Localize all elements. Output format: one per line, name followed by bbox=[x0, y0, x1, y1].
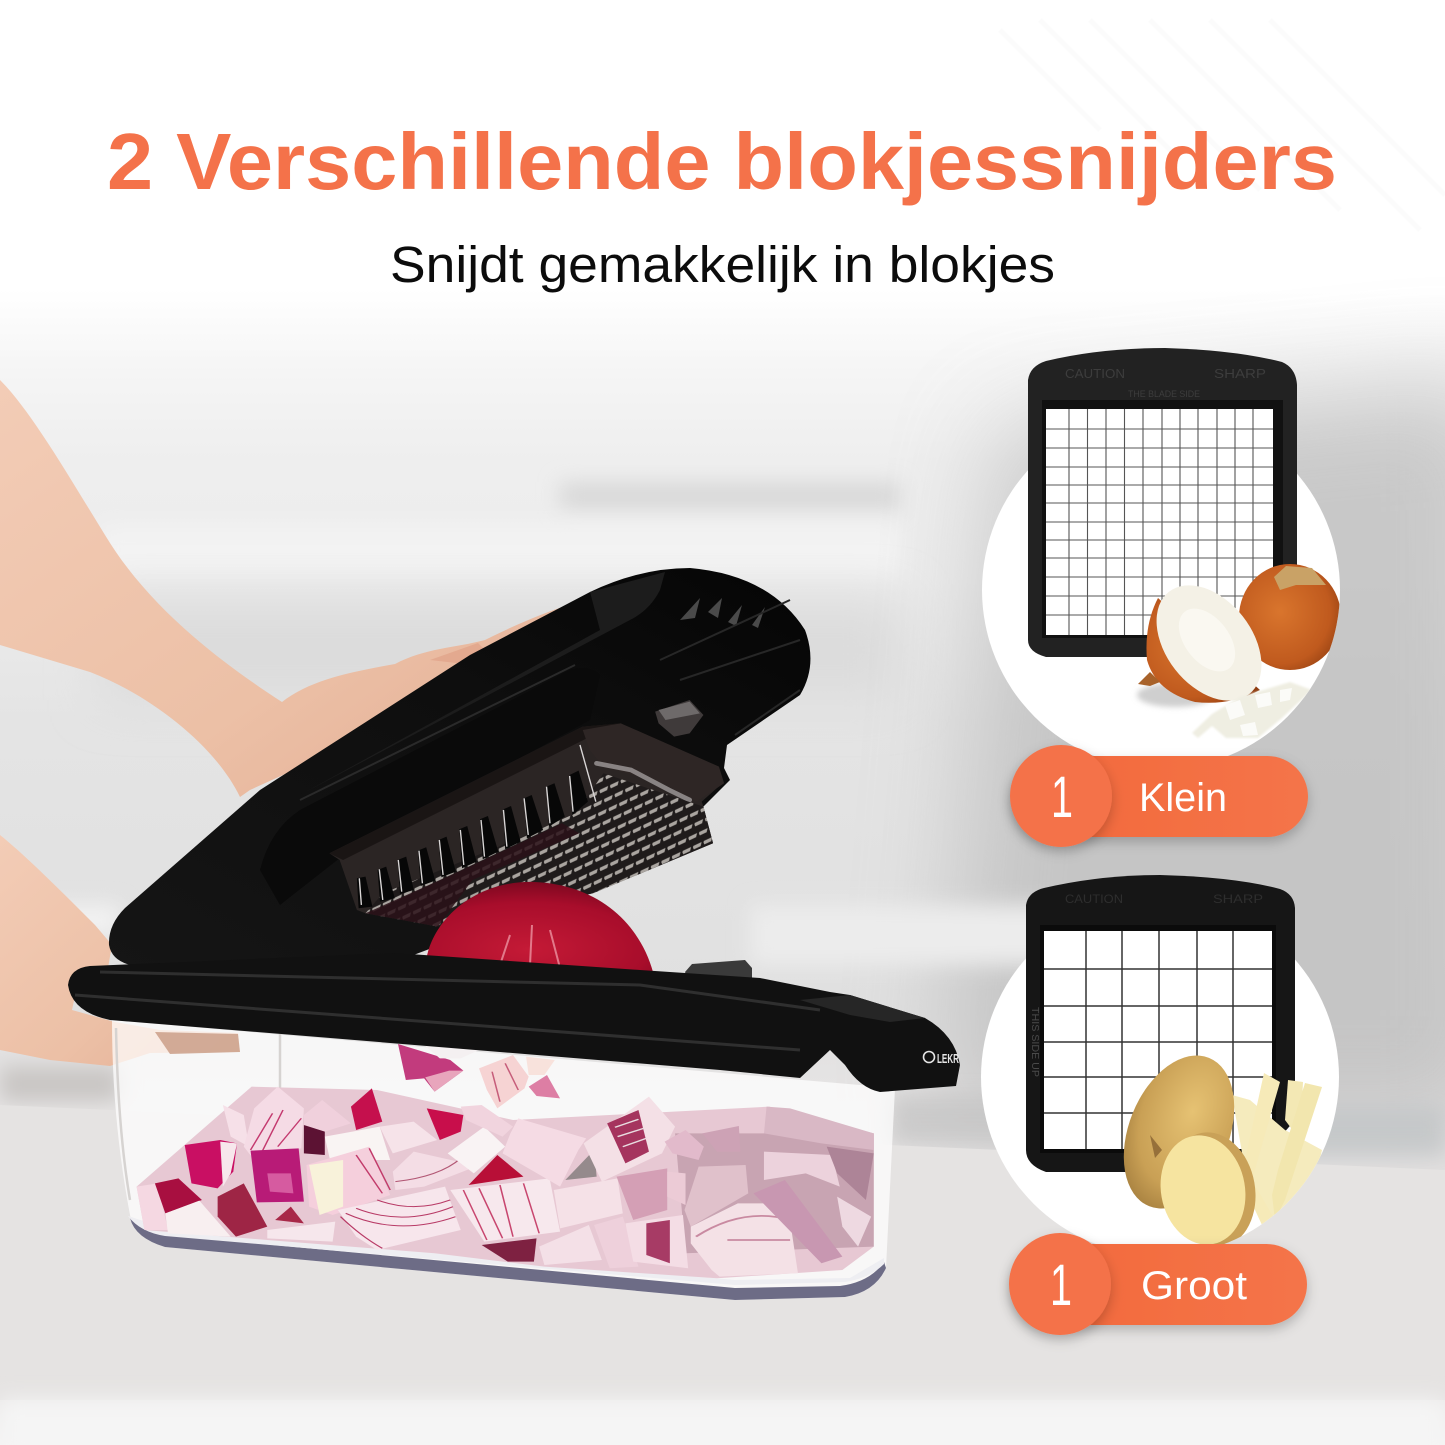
blade grid underside bbox=[366, 773, 713, 927]
logo on handle: LEKR bbox=[937, 1051, 959, 1066]
small dice blade frame: CAUTION bbox=[1065, 366, 1125, 381]
left group bbox=[137, 1183, 168, 1230]
base rim and handle bbox=[68, 953, 960, 1092]
label pill: Klein: 1 bbox=[1051, 765, 1073, 830]
red onion bbox=[426, 882, 653, 972]
container bbox=[112, 1020, 895, 1300]
number badge bbox=[1010, 745, 1112, 847]
panel: small cutter "Klein" bbox=[982, 348, 1341, 847]
white circle bbox=[981, 898, 1339, 1256]
small dice blade frame: SHARP bbox=[1214, 366, 1266, 381]
white circle bbox=[982, 411, 1340, 769]
big ringed piece bbox=[338, 1187, 461, 1250]
large dice blade frame: CAUTION bbox=[1065, 892, 1123, 906]
hand: lower hand gripping the base bbox=[0, 835, 240, 1066]
label pill: Groot: Groot bbox=[1141, 1264, 1247, 1308]
small latch on base bbox=[685, 960, 752, 985]
falling pieces bbox=[398, 1044, 463, 1092]
label pill: Klein bbox=[1010, 745, 1308, 847]
hand: upper arm holding the lid bbox=[0, 380, 575, 797]
large dice blade frame: SHARP bbox=[1213, 892, 1263, 906]
lid details bbox=[260, 572, 800, 905]
label pill: Klein: Klein bbox=[1139, 776, 1227, 820]
lid: black upper arm bbox=[109, 568, 810, 966]
logo on handle bbox=[924, 1051, 959, 1066]
ringed block bbox=[450, 1178, 560, 1242]
label pill: Groot bbox=[1009, 1233, 1307, 1335]
title: 2 Verschillende blokjessnijders bbox=[107, 117, 1337, 206]
number badge bbox=[1009, 1233, 1111, 1335]
chopped red onion bbox=[137, 1044, 874, 1278]
right group bbox=[617, 1168, 667, 1220]
blade block bbox=[329, 700, 724, 927]
small dice blade frame bbox=[1028, 348, 1297, 657]
large dice blade frame bbox=[1026, 875, 1295, 1172]
subtitle: Snijdt gemakkelijk in blokjes bbox=[390, 236, 1055, 293]
food chopper bbox=[68, 568, 960, 1300]
small dice blade frame: THE BLADE SIDE bbox=[1128, 389, 1200, 399]
panel: large cutter "Groot" bbox=[981, 875, 1339, 1335]
large dice blade frame: THIS SIDE UP bbox=[1029, 1007, 1040, 1077]
potatoes and fries bbox=[1124, 1056, 1322, 1244]
onions and diced onion bbox=[1135, 564, 1341, 738]
label pill: Groot: 1 bbox=[1050, 1253, 1072, 1318]
comb teeth bbox=[357, 771, 588, 908]
